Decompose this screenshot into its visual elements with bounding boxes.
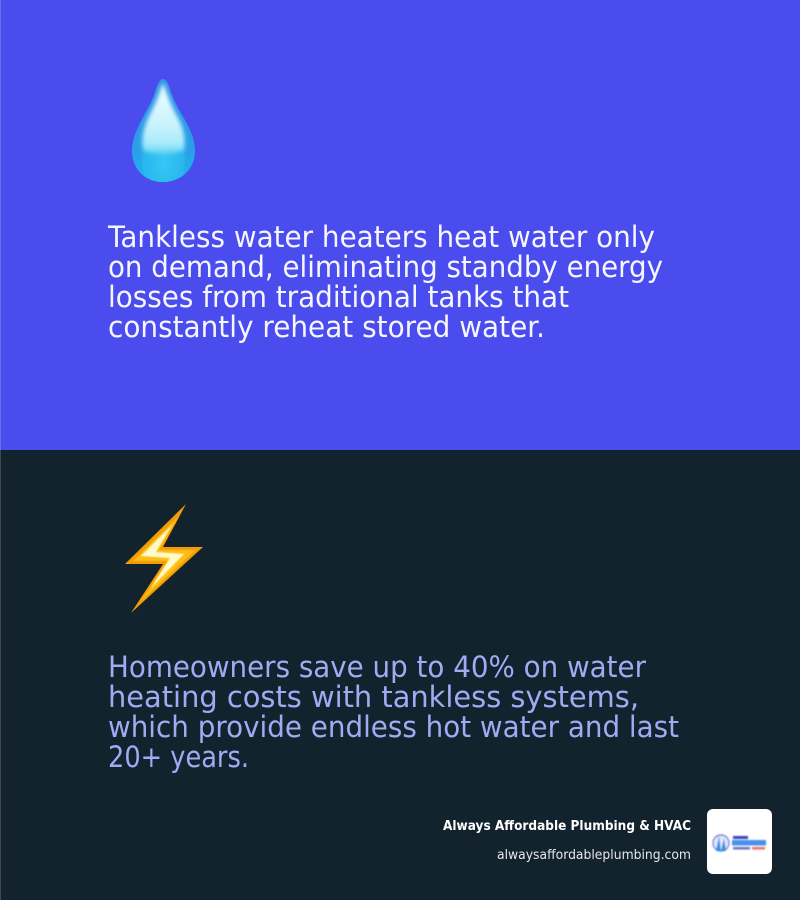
icon: lightning bolt <box>125 504 203 613</box>
panel: tankless on demand <box>0 0 800 450</box>
text: savings description: heating costs with tankless systems, <box>108 680 639 714</box>
website url: alwaysaffordableplumbing.com <box>497 847 691 863</box>
footer: brand <box>443 809 772 874</box>
icon: water drop <box>132 79 195 182</box>
text: savings description: 20+ years. <box>108 740 249 774</box>
text: on-demand description: losses from traditional tanks that <box>108 280 569 314</box>
logo <box>707 809 772 874</box>
text: on-demand description: constantly reheat stored water. <box>108 310 545 344</box>
text: savings description: Homeowners save up to 40% on water <box>108 650 646 684</box>
text: on-demand description: Tankless water heaters heat water only <box>107 220 655 254</box>
text: on-demand description: on demand, eliminating standby energy <box>108 250 663 284</box>
text: savings description <box>108 650 679 774</box>
panel: savings <box>0 450 800 900</box>
text: savings description: which provide endless hot water and last <box>108 710 679 744</box>
text: on-demand description <box>107 220 663 344</box>
brand name: Always Affordable Plumbing & HVAC <box>443 818 691 834</box>
